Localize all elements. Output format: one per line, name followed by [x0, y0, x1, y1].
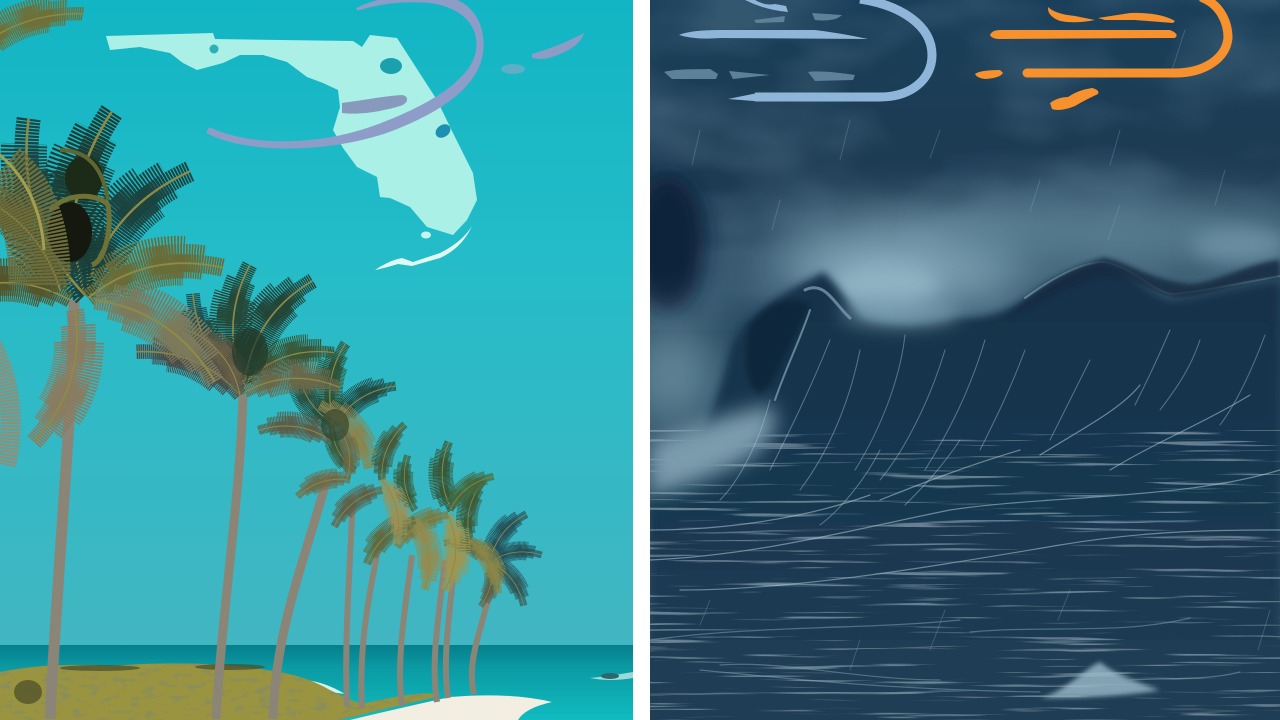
panel: stormy sea [626, 0, 1280, 720]
lower sea fill [650, 640, 1280, 720]
orange gust right [1098, 13, 1175, 23]
swirl dash [342, 95, 407, 114]
wind tail [728, 92, 760, 102]
palm 2 [137, 265, 340, 399]
main wave [650, 260, 1280, 640]
orange dash [975, 70, 1003, 79]
left edge palm [0, 0, 83, 465]
wind fragment [745, 0, 788, 12]
rain [692, 30, 1270, 670]
cloud texture [650, 0, 1280, 330]
dune shading [14, 664, 265, 704]
palm 1 [0, 109, 227, 448]
wind icon, orange [975, 0, 1228, 110]
palms, far group [295, 421, 542, 607]
wave streaks [720, 330, 1265, 525]
dune texture [0, 663, 440, 720]
surf lines [305, 672, 633, 694]
panel: sunny Florida beach [0, 0, 633, 720]
crest dark edge [1010, 258, 1280, 318]
lower sea lines [650, 618, 1240, 692]
sky [0, 0, 633, 648]
wave crest foam [775, 262, 1280, 400]
sea foam veins [650, 385, 1280, 590]
orange squiggle [1050, 88, 1098, 110]
wind icon, blue [664, 0, 932, 102]
storm mist [626, 203, 1280, 430]
crest spray [840, 298, 960, 326]
lower-left foam [650, 405, 776, 495]
lake dots [210, 44, 453, 238]
hurricane swirl, purple [208, 0, 584, 147]
dark barrel [746, 300, 810, 395]
sand [350, 695, 552, 720]
swirl fragments [532, 33, 584, 59]
grass dune [0, 663, 440, 720]
distant boat [601, 673, 619, 679]
map of Florida [106, 33, 477, 270]
palm 3 [259, 342, 396, 480]
Florida Keys [375, 226, 472, 270]
faded swirl fragment [501, 64, 525, 74]
breaking whitecap [1040, 662, 1160, 698]
wind line [679, 30, 868, 39]
sea texture [650, 430, 1280, 720]
orange line [990, 30, 1177, 39]
faded wind dashes [664, 13, 855, 81]
orange gusts [1048, 7, 1095, 22]
ocean [0, 645, 633, 720]
storm sky [650, 0, 1280, 640]
dark cloud [632, 175, 704, 315]
palm trunks [50, 300, 490, 719]
